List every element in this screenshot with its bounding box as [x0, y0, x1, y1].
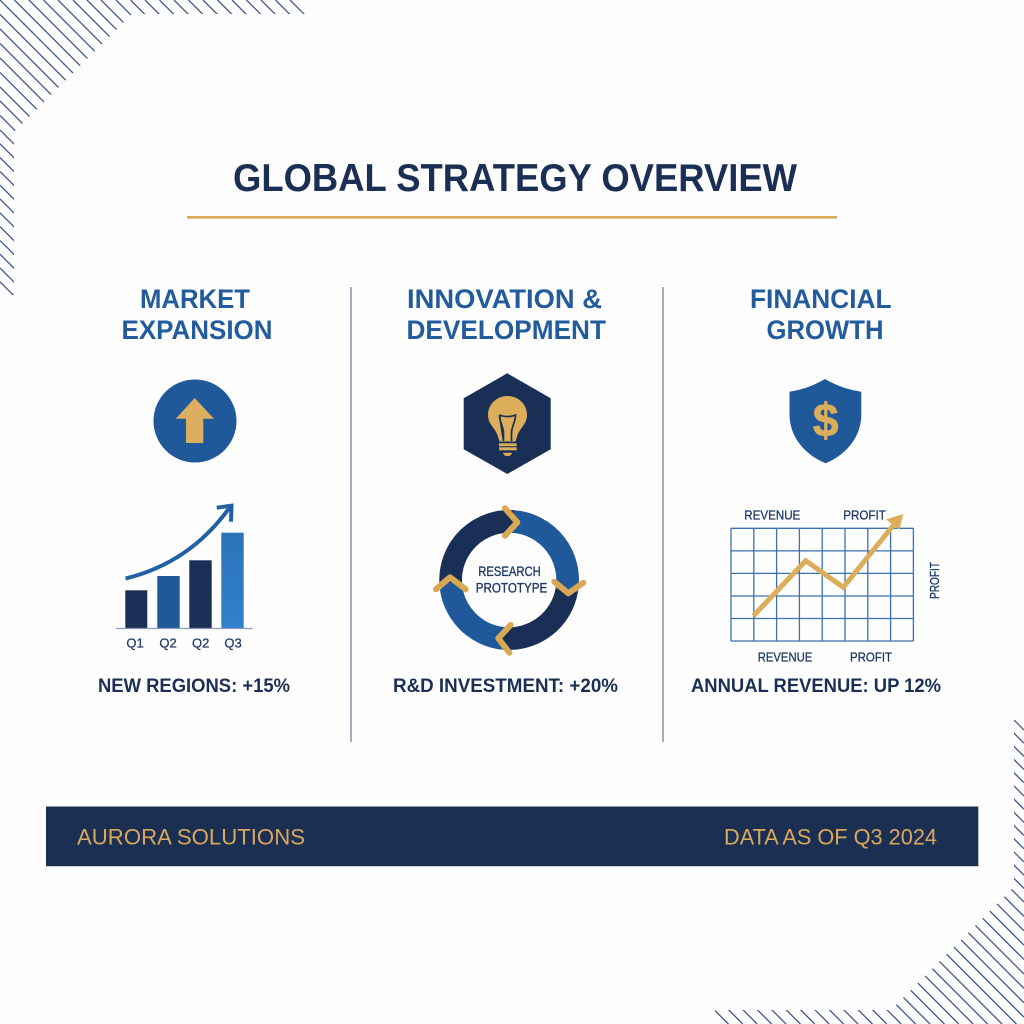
panel: financial growth — [691, 284, 942, 697]
line chart: revenue and profit: PROFIT — [850, 650, 892, 665]
cycle diagram: research and prototype: RESEARCH — [478, 564, 541, 579]
line chart: revenue and profit: PROFIT — [927, 562, 942, 599]
cycle diagram: research and prototype: PROTOTYPE — [476, 581, 547, 596]
title: GLOBAL STRATEGY OVERVIEW — [233, 157, 797, 200]
icon: light bulb in hexagon — [464, 373, 551, 474]
metric: new regions: NEW REGIONS: +15% — [98, 676, 290, 697]
icon: dollar shield: $ — [813, 394, 838, 446]
bar chart: quarterly growth: Q1 — [126, 636, 144, 651]
icon: dollar shield — [790, 379, 861, 463]
heading: market expansion: MARKET — [140, 284, 250, 314]
panel: innovation and development — [393, 284, 618, 697]
heading: market expansion — [122, 284, 272, 345]
line chart: revenue and profit: REVENUE — [758, 650, 813, 665]
footer bar — [46, 806, 978, 866]
heading: financial growth: FINANCIAL — [750, 284, 892, 314]
bar chart: quarterly growth: Q3 — [224, 636, 242, 651]
heading: innovation and development — [406, 284, 606, 345]
heading: innovation and development: DEVELOPMENT — [406, 315, 606, 345]
heading: financial growth: GROWTH — [766, 315, 884, 345]
cycle diagram: research and prototype — [436, 508, 583, 653]
metric: annual revenue: ANNUAL REVENUE: UP 12% — [691, 676, 941, 697]
bar chart: quarterly growth: Q2 — [192, 636, 209, 651]
heading: financial growth — [750, 284, 892, 345]
line chart: revenue and profit: PROFIT — [843, 507, 886, 522]
metric: r and d investment: R&D INVESTMENT: +20% — [393, 676, 618, 697]
bar chart: quarterly growth — [116, 506, 253, 651]
bar chart: quarterly growth: Q2 — [159, 636, 177, 651]
heading: innovation and development: INNOVATION & — [407, 284, 602, 314]
heading: market expansion: EXPANSION — [122, 315, 272, 345]
footer bar: AURORA SOLUTIONS — [77, 824, 305, 850]
line chart: revenue and profit: REVENUE — [744, 507, 801, 522]
line chart: revenue and profit — [731, 507, 942, 665]
panel: market expansion — [98, 284, 290, 697]
footer bar: DATA AS OF Q3 2024 — [724, 824, 937, 850]
icon: up arrow in circle — [154, 380, 236, 462]
